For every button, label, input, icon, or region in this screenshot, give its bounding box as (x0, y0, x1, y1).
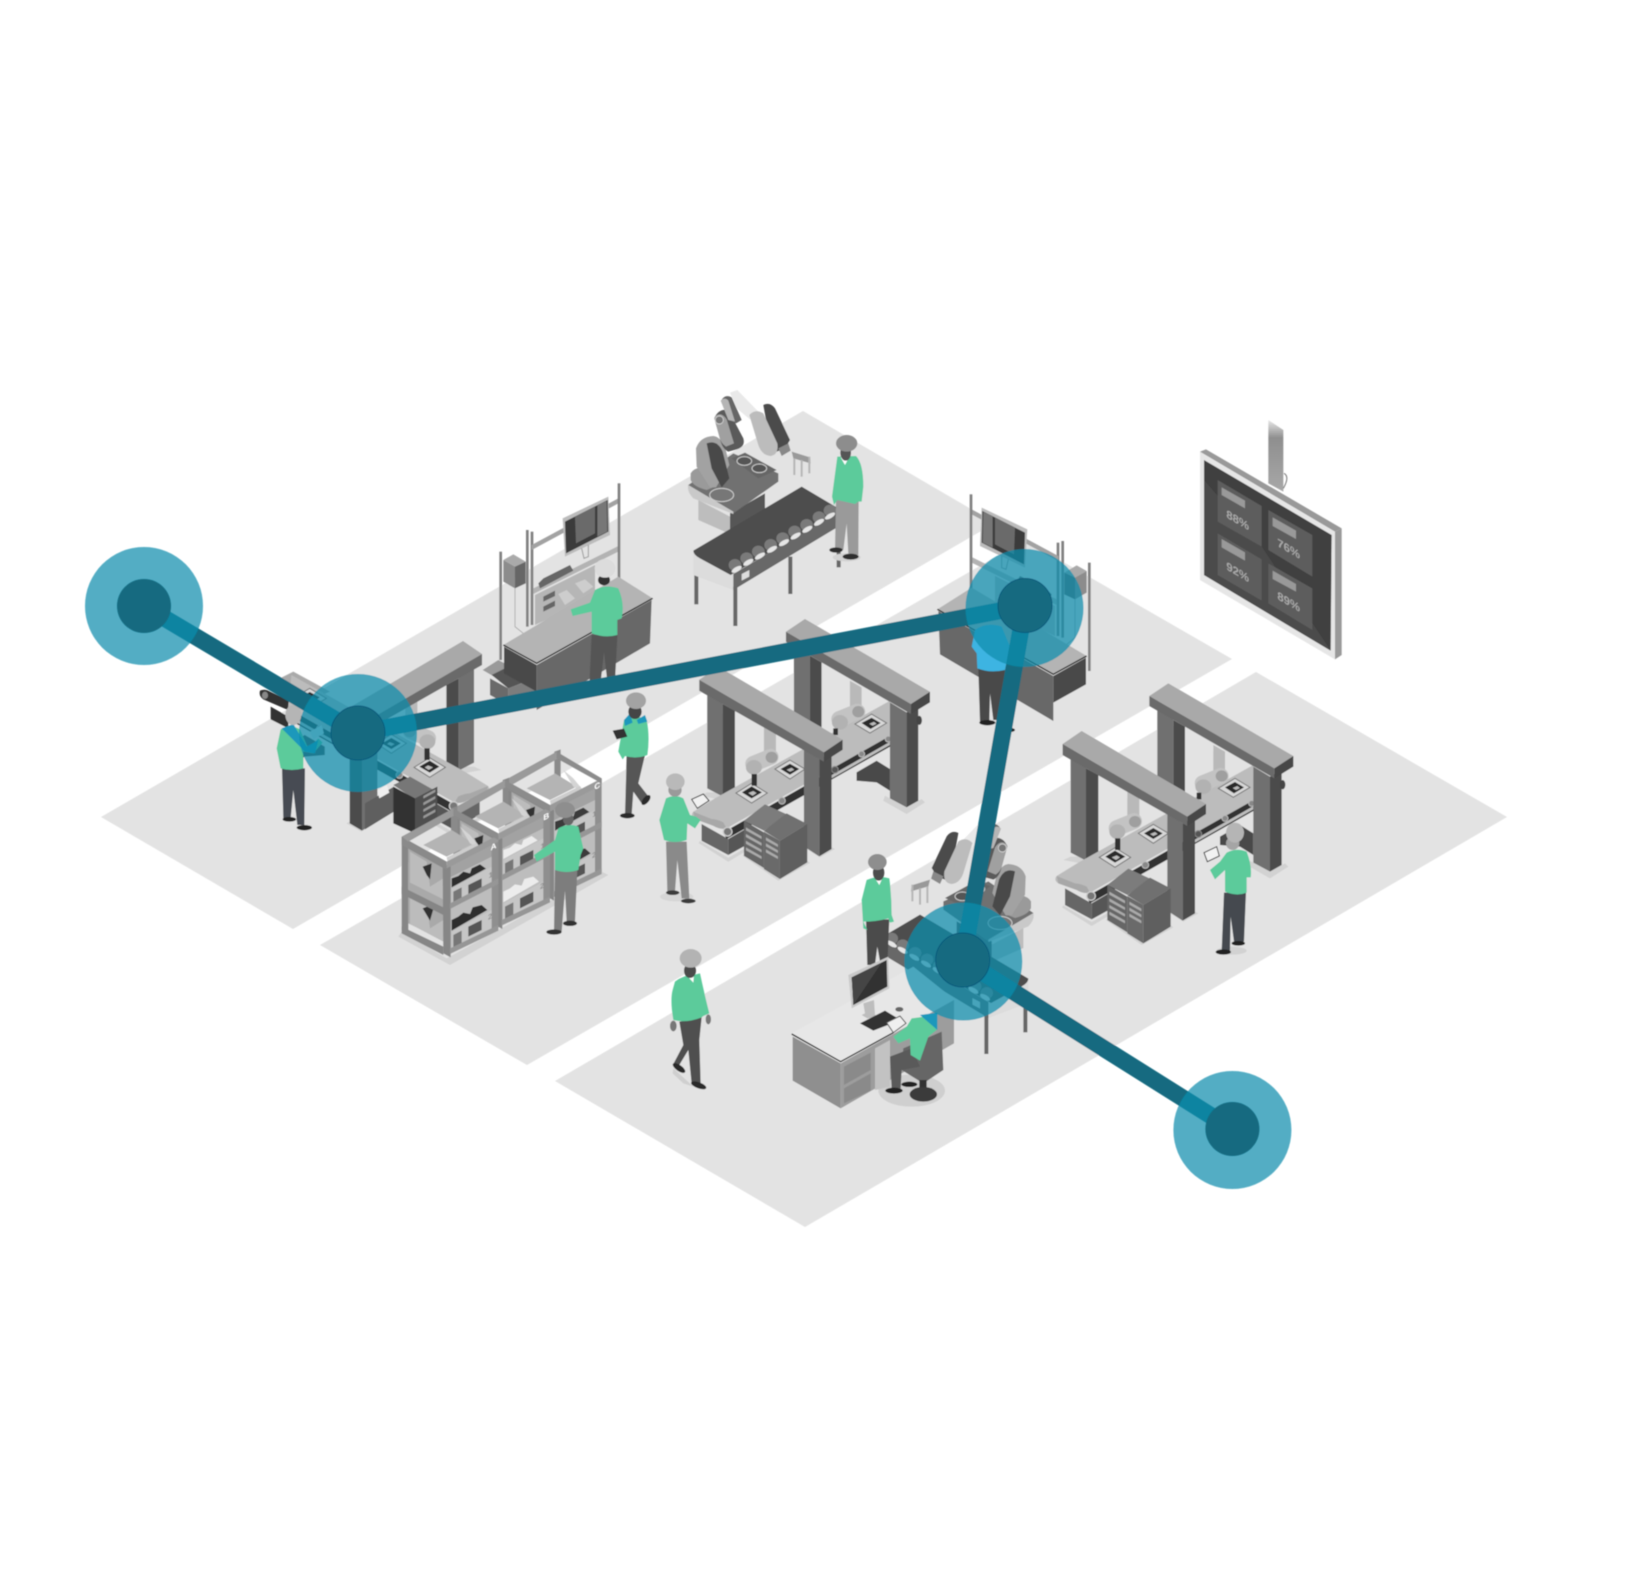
rack C (505, 749, 602, 901)
rack C items (555, 808, 591, 874)
wall dashboard display (1200, 420, 1342, 659)
rack B (453, 778, 550, 929)
floor zone: lower right (555, 672, 1507, 1227)
robot arm cell with conveyor, back (688, 390, 841, 626)
KPI tile: 92% (1218, 533, 1262, 601)
conveyor gantry cell, left (260, 641, 489, 836)
network node 1 (85, 547, 203, 665)
keyboard and mouse (860, 1011, 901, 1031)
desk front face (841, 1000, 954, 1108)
monitor (848, 957, 889, 1018)
walking worker with tablet (613, 692, 652, 818)
desk top (792, 967, 955, 1062)
rack labels: B (543, 810, 549, 823)
workstation, right, behind node (937, 494, 1091, 721)
rack labels: 1 (489, 869, 493, 880)
open crate by left workstation (483, 660, 535, 705)
rack B items (503, 836, 539, 902)
rack labels: 2 (592, 849, 597, 860)
rack labels: 1 (592, 808, 597, 819)
network connection lines (144, 606, 1232, 1129)
conveyor and gantry, mirrored (288, 641, 489, 836)
seat shadow (878, 1075, 945, 1107)
rack labels: 2 (488, 911, 493, 922)
worker near left node (277, 705, 324, 830)
standing worker, center (862, 854, 894, 965)
conveyor gantry cell, right (1055, 683, 1293, 945)
rack labels: C (594, 780, 600, 792)
worker with tablet, right (1204, 823, 1251, 955)
worker with tablet, middle (659, 773, 709, 903)
floor zone: middle (320, 540, 1232, 1065)
KPI tile: 88% (1218, 480, 1262, 547)
seated operator (890, 1048, 920, 1088)
rack labels (488, 780, 600, 922)
KPI tile: 92%: 92% (1226, 559, 1249, 585)
floor zone: upper left (101, 411, 995, 929)
assembly workstation, left (499, 483, 653, 710)
rack labels: 2 (540, 880, 545, 891)
KPI tile: 88%: 88% (1226, 507, 1249, 533)
network node 2 (299, 674, 417, 792)
network node 4 (904, 902, 1022, 1020)
rack shadow (398, 872, 608, 965)
floor zones (101, 411, 1507, 1227)
rack labels: 1 (541, 840, 545, 851)
KPI tile: 76% (1268, 510, 1312, 577)
KPI tile: 76%: 76% (1277, 536, 1300, 562)
worker at right workstation (972, 625, 1015, 732)
control desk with operator (792, 957, 955, 1108)
mounting pole (1268, 420, 1283, 492)
display screen (1204, 460, 1332, 651)
network node 3 (966, 549, 1084, 667)
illustration artwork (85, 390, 1507, 1227)
storage racks (398, 749, 608, 965)
gantry brace and cabinet (365, 777, 438, 833)
chair (902, 1032, 943, 1083)
worker by top conveyor (829, 435, 863, 561)
robot arm cell with conveyor, front (881, 818, 1034, 1054)
walking worker, foreground (670, 949, 711, 1091)
KPI tile: 89% (1268, 563, 1312, 630)
conveyor far end (260, 672, 330, 728)
worker at racks (534, 802, 583, 935)
rack labels: A (491, 840, 496, 853)
rack A (402, 806, 498, 957)
worker at left workstation (571, 559, 623, 688)
conveyor gantry cell, middle (692, 619, 930, 881)
display frame (1200, 452, 1335, 659)
desk left face (793, 1037, 841, 1108)
rack A items (452, 864, 487, 931)
KPI tile: 89%: 89% (1277, 589, 1300, 615)
network node 5 (1173, 1071, 1291, 1189)
